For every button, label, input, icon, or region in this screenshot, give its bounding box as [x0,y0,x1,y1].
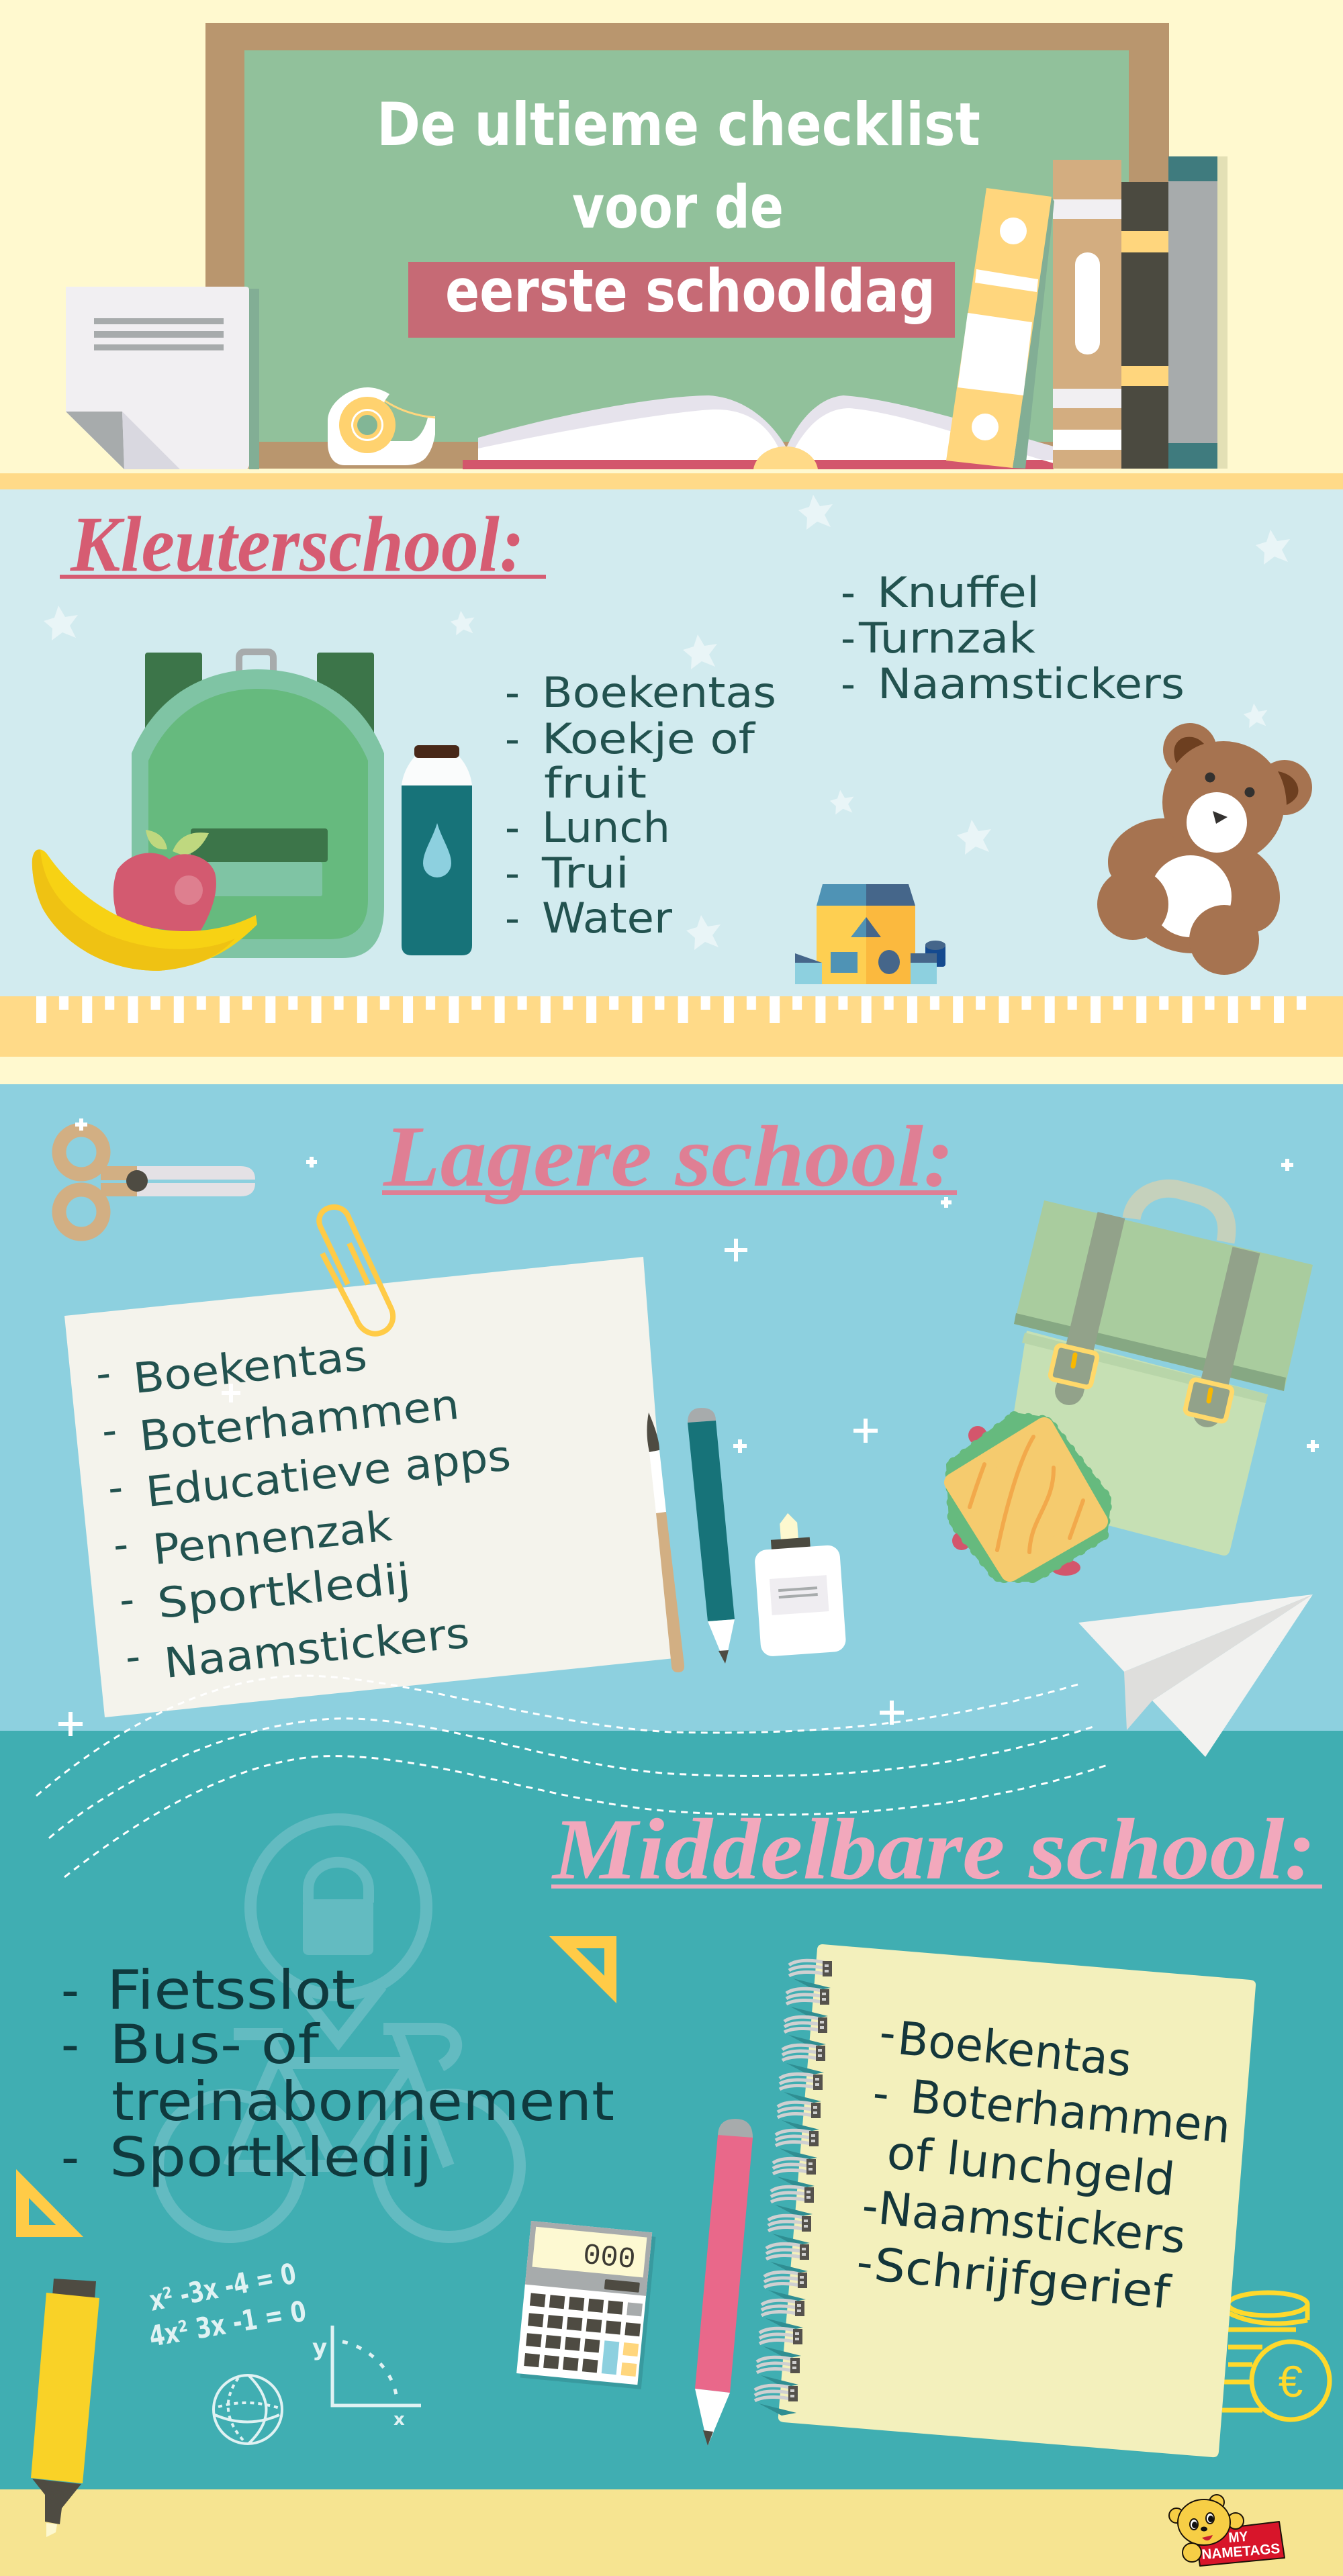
icon: open book [463,395,1054,469]
graph doodle [312,2326,421,2430]
list: kleuterschool right: - [841,659,855,708]
footer band [0,2489,1343,2576]
icon: paper plane [1078,1594,1313,1757]
icon: yellow binder [946,188,1054,469]
list: notebook: - [877,2006,898,2060]
icon: pink pencil [695,2119,753,2446]
icon: set square left [16,2169,83,2237]
list: kleuterschool left: Boekentas [542,668,776,717]
list: kleuterschool left: - [505,849,520,898]
graph doodle: y [312,2334,327,2361]
list: middelbare school left [61,1959,614,2189]
list: lagere school: - [93,1348,113,1398]
ruler [0,996,1343,1057]
list: lagere school: Boekentas [131,1331,369,1403]
icon: calculator [516,2221,656,2389]
list: kleuterschool left: - [505,803,520,852]
list: lagere school: Boterhammen [137,1380,461,1461]
icon: teddy bear [1097,723,1312,975]
icon: coins [1222,2293,1330,2420]
graph doodle: x [393,2410,405,2430]
notebook [778,1944,1256,2457]
list: lagere school: - [99,1405,119,1456]
title: De ultieme checklist [377,90,980,159]
heading: middelbare school: Middelbare school: [551,1801,1316,1898]
list: lagere school: - [111,1519,130,1570]
panel: lagere school background [0,1084,1343,1731]
chalkboard [205,23,1169,469]
list: notebook: Boekentas [895,2012,1133,2087]
list: notebook: of lunchgeld [884,2126,1177,2207]
icon: toy blocks [795,884,945,984]
dashed flight paths [36,1676,1109,1877]
title: eerste schooldag [445,256,935,326]
math formulas: x² -3x -4 = 0 [147,2257,299,2318]
math formulas: 4x² 3x -1 = 0 [147,2295,308,2353]
logo: my nametags [1169,2495,1285,2566]
icon: glue bottle [751,1510,847,1657]
icon: sandwich [950,1416,1108,1578]
icon: green backpack [132,652,384,958]
icon: apple [113,830,216,935]
icon: scissors [59,1130,255,1234]
list: notebook: - [870,2066,892,2121]
list: middelbare school left: Bus- of [109,2013,320,2076]
icon: set square right [549,1936,616,2003]
icon: paperclip [319,1207,393,1334]
list: kleuterschool right [841,568,1185,708]
shelf [0,473,1343,489]
title: voor de [572,173,784,242]
list: kleuterschool right: Knuffel [877,568,1039,617]
list: lagere school: - [123,1631,142,1682]
icon: water bottle [402,745,472,955]
title [377,90,980,338]
watermark: bicycle and lock [158,1819,520,2237]
list: lagere school: Sportkledij [155,1554,413,1628]
icon: books [1053,156,1228,469]
icon: paper sheet [66,287,259,469]
panel: kleuterschool background [0,489,1343,996]
logo: my nametags: NAMETAGS [1201,2541,1281,2563]
decorative stars [44,495,1290,950]
list: kleuterschool right: - [841,568,855,617]
note paper [64,1257,674,1717]
logo: my nametags: MY [1228,2529,1248,2546]
list: notebook: - [854,2236,876,2290]
list: middelbare school left: Fietsslot [107,1959,355,2021]
list: kleuterschool left: Water [542,894,673,943]
list: middelbare school left: treinabonnement [111,2070,614,2133]
list: middelbare school left: - [61,2126,79,2189]
icon: paint brush [647,1413,684,1672]
list: kleuterschool left: - [505,714,520,763]
panel: middelbare school background [0,1731,1343,2489]
list: kleuterschool left: Koekje of [542,714,756,763]
list: lagere school: Pennenzak [150,1501,394,1574]
list: kleuterschool left: - [505,894,520,943]
list: lagere school: Naamstickers [162,1608,471,1688]
heading: lagere school: Lagere school: [383,1108,954,1205]
list: lagere school: - [105,1462,125,1513]
list: notebook: - [860,2179,881,2234]
list: middelbare school left: - [61,1959,79,2021]
decorative plus signs [58,1118,1319,1736]
notebook spiral [755,1960,832,2416]
list: middelbare school left: - [61,2013,79,2076]
icon: satchel [1001,1188,1313,1556]
sphere doodle [214,2375,282,2444]
icon: coins: € [1279,2356,1303,2406]
list: kleuterschool left: Lunch [542,803,670,852]
list: kleuterschool left [505,668,776,943]
list: notebook: Naamstickers [876,2182,1188,2264]
icon: banana [32,849,257,971]
list: lagere school: - [117,1574,136,1625]
list: lagere school: Educatieve apps [144,1431,513,1517]
list: kleuterschool right: - [841,614,855,663]
icon: teal pencil [688,1408,735,1664]
list: middelbare school left: Sportkledij [109,2126,432,2189]
icon: tape roll [328,387,435,465]
list: notebook [854,2006,1233,2320]
heading: kleuterschool: Kleuterschool: [70,500,524,588]
list: notebook: Boterhammen [908,2070,1233,2154]
list: kleuterschool right: Turnzak [858,614,1035,663]
list: notebook: Schrijfgerief [872,2238,1174,2320]
icon: calculator: 000 [582,2239,637,2277]
math formulas [147,2257,308,2353]
list: kleuterschool right: Naamstickers [878,659,1185,708]
list: kleuterschool left: Trui [541,849,629,898]
list: lagere school [93,1331,513,1688]
list: kleuterschool left: - [505,668,520,717]
list: kleuterschool left: fruit [544,759,647,808]
icon: highlighter [31,2279,99,2537]
